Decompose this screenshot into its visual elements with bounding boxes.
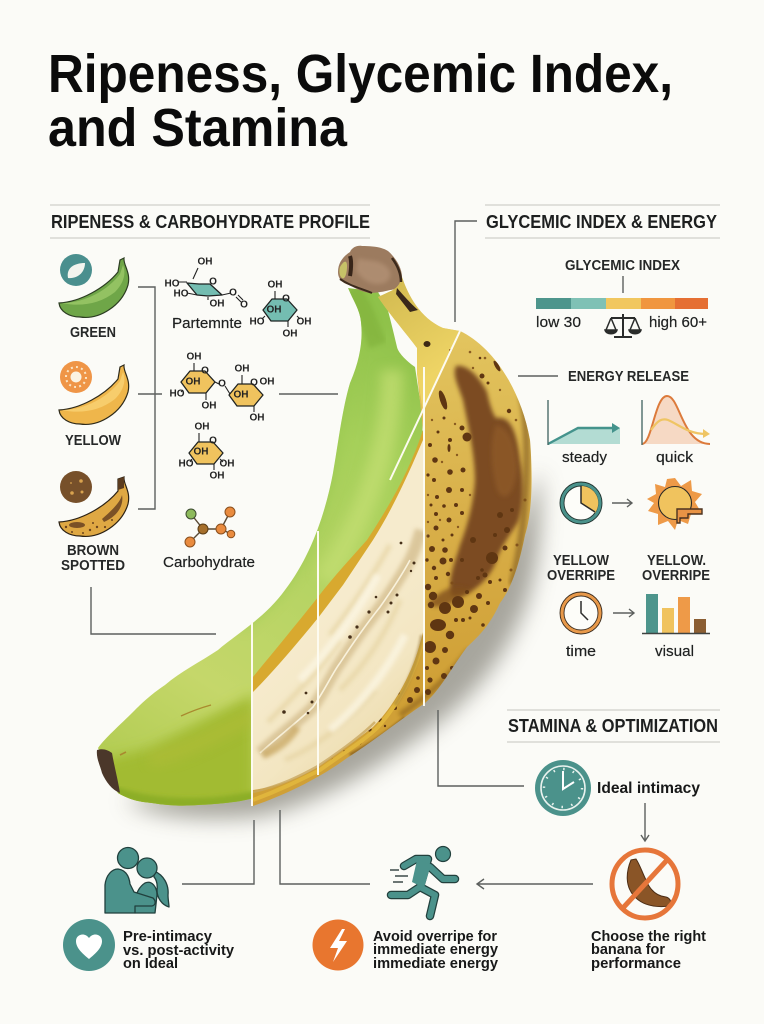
green banana xyxy=(59,258,129,317)
label: glycemic index: GLYCEMIC INDEX xyxy=(565,258,680,274)
molecule: glucose ring: OH xyxy=(194,422,210,432)
icon: orange clock xyxy=(560,592,602,634)
title xyxy=(48,44,673,158)
heading: stamina and optimization: STAMINA & OPTIMIZATION xyxy=(508,716,718,736)
molecule: chair sugar xyxy=(164,256,248,310)
heading: glycemic index and energy: GLYCEMIC INDEX & ENERGY xyxy=(486,212,717,232)
label: visual: visual xyxy=(655,643,694,660)
icon: leaf badge xyxy=(60,254,92,286)
molecule: disaccharide: OH xyxy=(186,376,200,388)
glycemic index scale bar: high 60+ xyxy=(649,314,707,331)
molecule: chair sugar: HO xyxy=(164,278,180,290)
label: yellow overripe right xyxy=(642,553,710,584)
label: ideal intimacy: Ideal intimacy xyxy=(597,780,700,797)
icon: teal clock xyxy=(535,760,591,816)
connector line xyxy=(280,810,370,884)
icon: brown badge xyxy=(60,471,92,503)
arrow left xyxy=(477,879,593,889)
chart: quick energy xyxy=(642,396,710,466)
molecule: disaccharide: O xyxy=(201,366,209,376)
text: choose the right banana xyxy=(591,928,706,972)
text: avoid overripe: Avoid overripe for xyxy=(373,928,497,945)
brown spots xyxy=(332,357,514,762)
text: avoid overripe xyxy=(373,928,499,972)
banana main illustration xyxy=(95,246,541,819)
panel: stamina and optimization xyxy=(63,710,720,972)
label: carbohydrate: Carbohydrate xyxy=(163,554,255,571)
heading: energy release: ENERGY RELEASE xyxy=(568,369,689,385)
blossom tip xyxy=(97,749,120,793)
molecule: teal ring: O xyxy=(282,294,290,304)
molecule: disaccharide: OH xyxy=(250,412,264,424)
label: yellow overripe left: OVERRIPE xyxy=(547,568,615,584)
molecule: chair sugar: O xyxy=(229,288,237,298)
molecule: disaccharide: O xyxy=(218,378,226,390)
connector bracket xyxy=(91,287,338,634)
title: Ripeness, Glycemic Index, xyxy=(48,44,673,104)
molecule: teal ring: OH xyxy=(268,280,282,290)
label: partemnte: Partemnte xyxy=(172,315,242,332)
stem cap xyxy=(338,246,402,293)
leader line xyxy=(455,221,477,322)
text: pre-intimacy xyxy=(123,928,235,972)
molecule: disaccharide: O xyxy=(250,378,258,388)
label: brown spotted: BROWN xyxy=(67,543,119,559)
label: brown spotted: SPOTTED xyxy=(61,558,125,574)
label: yellow overripe right: OVERRIPE xyxy=(642,568,710,584)
molecule: chair sugar: O xyxy=(209,276,217,288)
text: pre-intimacy: on Ideal xyxy=(123,955,178,972)
molecule: carbohydrate nodes xyxy=(185,507,235,547)
icon: balance scale xyxy=(605,314,641,337)
molecule: disaccharide: OH xyxy=(234,364,250,374)
icon: heart badge xyxy=(63,919,115,971)
text: avoid overripe: immediate energy xyxy=(373,955,499,972)
molecule: glucose ring: HO xyxy=(178,458,194,470)
ripe spotted section of banana xyxy=(253,277,532,806)
bar chart xyxy=(642,594,710,634)
icon: sun xyxy=(647,478,702,530)
label: yellow: YELLOW xyxy=(65,433,121,449)
connector line xyxy=(182,820,254,884)
label: yellow overripe right: YELLOW. xyxy=(647,553,706,569)
arrow xyxy=(613,609,634,617)
label: yellow overripe left: YELLOW xyxy=(553,553,609,569)
arrow xyxy=(612,499,632,507)
text: choose the right banana: banana for xyxy=(591,941,665,958)
molecule: chair sugar: OH xyxy=(198,256,212,268)
text: pre-intimacy: vs. post-activity xyxy=(123,942,235,959)
molecule: disaccharide: OH xyxy=(260,376,274,388)
text: avoid overripe: immediate energy xyxy=(373,941,499,958)
molecule: disaccharide: OH xyxy=(202,400,216,412)
panel: ripeness and carbohydrate profile xyxy=(50,205,370,634)
icon: clock with yellow wedge xyxy=(560,482,602,524)
arrow down xyxy=(641,803,649,841)
green section of banana xyxy=(95,288,423,815)
section divider lines xyxy=(252,331,460,806)
molecule: teal ring: HO xyxy=(250,316,265,328)
molecule: teal ring: OH xyxy=(266,304,282,316)
chart: steady energy xyxy=(548,400,620,466)
title: and Stamina xyxy=(48,98,348,158)
label: time: time xyxy=(566,643,596,660)
icon: no overripe banana xyxy=(612,850,678,918)
label: green: GREEN xyxy=(70,325,116,341)
text: pre-intimacy: Pre-intimacy xyxy=(123,928,213,945)
molecule: disaccharide: OH xyxy=(186,352,202,362)
icon: lightning badge xyxy=(312,920,364,970)
molecule: chair sugar: O xyxy=(240,300,248,310)
panel: glycemic index and energy xyxy=(455,205,720,660)
brown spotted banana xyxy=(59,477,129,536)
molecule: glucose ring xyxy=(178,422,234,482)
molecule: teal ring xyxy=(250,280,312,340)
label: brown spotted xyxy=(61,543,125,574)
glycemic index scale bar: low 30 xyxy=(536,314,581,331)
chart: steady energy: steady xyxy=(562,449,608,466)
glycemic index scale bar xyxy=(536,276,708,331)
molecule: chair sugar: OH xyxy=(210,298,224,310)
molecule: glucose ring: OH xyxy=(220,458,234,470)
molecule: chair sugar: HO xyxy=(174,288,189,300)
molecule: teal ring: OH xyxy=(296,316,312,328)
icon: runner xyxy=(390,846,455,916)
text: choose the right banana: performance xyxy=(591,955,681,972)
molecule: glucose ring: O xyxy=(209,436,217,446)
yellow banana xyxy=(59,365,129,424)
molecule: teal ring: OH xyxy=(282,328,298,340)
leader line xyxy=(438,710,524,786)
molecule: glucose ring: OH xyxy=(210,470,224,482)
label: yellow overripe left xyxy=(547,553,615,584)
molecule: glucose ring: OH xyxy=(194,446,208,458)
molecule: disaccharide xyxy=(170,352,274,424)
icon: couple xyxy=(105,848,169,913)
molecule: disaccharide: HO xyxy=(170,388,185,400)
heading: ripeness: RIPENESS & CARBOHYDRATE PROFILE xyxy=(51,212,370,232)
brown ripening blotch xyxy=(450,366,523,596)
chart: quick energy: quick xyxy=(656,449,694,466)
icon: sun badge xyxy=(60,361,92,393)
cut flesh section of banana xyxy=(253,430,423,800)
banana seeds xyxy=(282,542,416,714)
text: choose the right banana: Choose the right xyxy=(591,928,706,945)
molecule: disaccharide: OH xyxy=(234,390,248,400)
